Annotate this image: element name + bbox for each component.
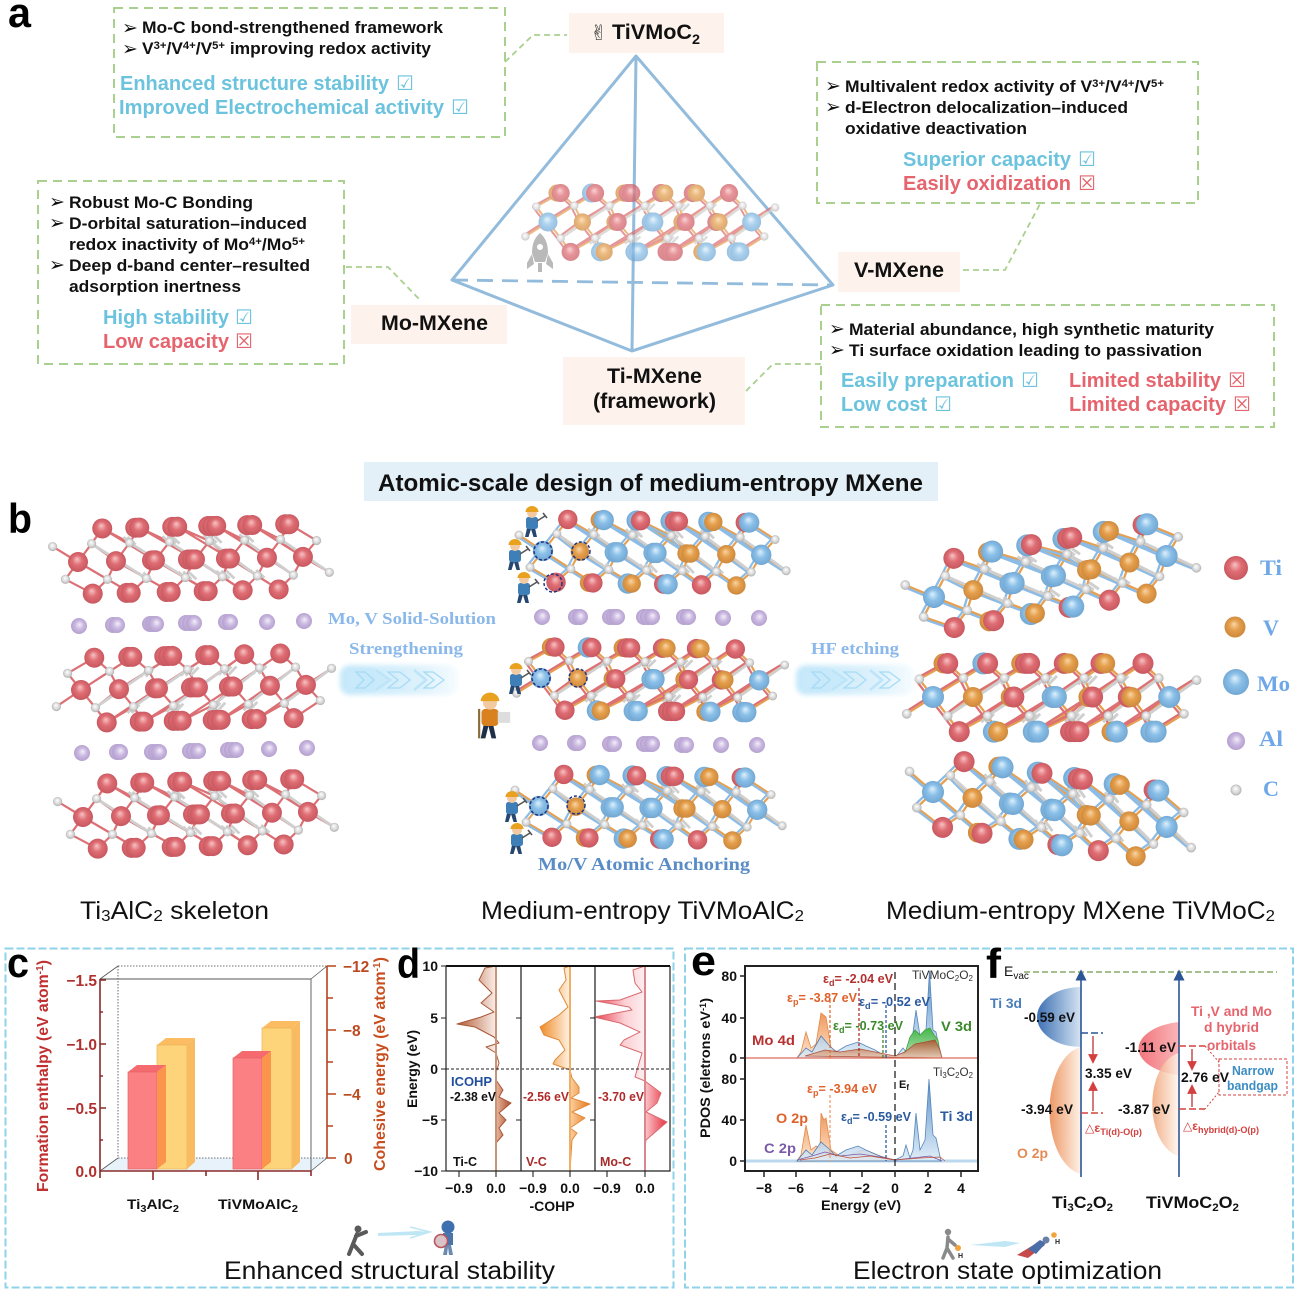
callout: TiVMoC2 properties <box>114 8 505 137</box>
axis labels: -COHP <box>529 1198 575 1214</box>
annotations: Mo 4d <box>752 1032 795 1048</box>
Mo-C curve <box>594 966 667 1147</box>
annotations: d <box>847 1116 853 1126</box>
energy annotations: orbitals <box>1207 1037 1256 1053</box>
V-C curve <box>540 966 590 1171</box>
energy annotations: hybrid(d)-O(p) <box>1198 1125 1259 1135</box>
annotations: = -3.87 eV <box>799 991 858 1005</box>
annotations: -2.56 eV <box>523 1090 570 1104</box>
axis labels: −0.9 <box>593 1180 621 1196</box>
callout: Ti-MXene properties: ☒ <box>1233 392 1251 416</box>
heading banner: Atomic-scale design of medium-entropy MXene <box>378 470 923 497</box>
material labels: TiVMoC <box>1146 1193 1209 1212</box>
callout: V-MXene properties: Easily oxidization <box>903 173 1071 195</box>
axis labels: PDOS (eletrons eV <box>697 1014 713 1138</box>
structure: medium-entropy MXene TiVMoC2 <box>895 505 1206 876</box>
axis labels: 0.0 <box>486 1180 506 1196</box>
energy annotations: -3.87 eV <box>1118 1101 1171 1117</box>
band edge dashes and arrows <box>1081 1033 1219 1113</box>
category labels: TiVMoAlC <box>218 1196 284 1212</box>
label: V-MXene: V-MXene <box>854 259 944 282</box>
material labels: 2 <box>1107 1202 1113 1214</box>
annotations: Mo-C <box>600 1155 631 1169</box>
annotations: = -2.04 eV <box>835 972 894 986</box>
right axis: cohesive energy: -1 <box>372 962 383 971</box>
Ti-C curve <box>457 966 511 1143</box>
right axis: cohesive energy <box>327 957 389 1171</box>
callout: Mo-MXene properties: 5+ <box>292 236 305 248</box>
annotations: p <box>793 997 799 1007</box>
callout: Ti-MXene properties: Limited stability <box>1069 370 1222 392</box>
category labels: 2 <box>292 1204 298 1215</box>
label: TiVMoC2: TiVMoC <box>612 21 690 44</box>
callout: Mo-MXene properties: ☑ <box>235 305 253 329</box>
callout: V-MXene properties: oxidative deactivation <box>845 119 1027 138</box>
callout: Mo-MXene properties: 4+ <box>249 236 262 248</box>
callout: Ti-MXene properties: Low cost <box>841 394 927 416</box>
annotations: E <box>899 1079 906 1091</box>
orbitals: Ti3C2O2 <box>1037 987 1081 1174</box>
annotations: = -0.52 eV <box>871 995 931 1009</box>
caption text: Enhanced structural stability <box>224 1257 556 1285</box>
legend: atoms: Mo <box>1257 671 1290 696</box>
axis labels: 4 <box>957 1180 965 1196</box>
energy annotations: △ε <box>1085 1121 1100 1135</box>
structure: Ti3AlC2 skeleton <box>47 513 339 860</box>
left axis: formation enthalpy <box>35 960 311 1192</box>
caption group: enhanced structural stability <box>224 1220 556 1285</box>
arrow: solid-solution strengthening: Mo, V Solid-Solution <box>328 609 497 628</box>
left axis: formation enthalpy: -1 <box>35 965 46 974</box>
axis labels: 0 <box>729 1050 737 1066</box>
callout: V-MXene properties: /V <box>1105 77 1122 96</box>
category labels <box>127 1196 298 1215</box>
dashed atom highlights <box>530 542 590 815</box>
callout: Mo-MXene properties: ➢ <box>49 191 65 213</box>
axis labels: −6 <box>788 1180 804 1196</box>
annotations: d <box>829 978 835 988</box>
material labels <box>1052 1193 1239 1214</box>
material labels: 2 <box>1212 1202 1219 1214</box>
callout: TiVMoC2 properties: 5+ <box>212 40 225 52</box>
callout: Ti-MXene properties: ☑ <box>934 392 952 416</box>
heading banner <box>364 462 938 501</box>
orbitals: TiVMoC2O2 <box>1139 1022 1179 1156</box>
callout: Ti-MXene properties: ➢ <box>829 318 845 340</box>
captions under structures: Ti <box>80 897 100 925</box>
annotations: ε <box>833 1019 839 1033</box>
captions under structures: 2 <box>795 908 804 925</box>
right axis: cohesive energy: ) <box>372 957 389 962</box>
axis labels: Energy (eV) <box>404 1030 420 1108</box>
energy annotations: Ti ,V and Mo <box>1191 1003 1272 1019</box>
MXene slab inside pyramid <box>521 184 779 261</box>
arrow: light blue transition <box>378 1227 430 1238</box>
callout: TiVMoC2 properties: 3+ <box>154 40 166 52</box>
right axis: cohesive energy: 0 <box>344 1151 353 1168</box>
callout: V-MXene properties: 4+ <box>1122 78 1135 90</box>
panel f: energy level diagram <box>986 940 1287 1214</box>
left axis: formation enthalpy: 0.0 <box>75 1164 97 1181</box>
panel letter b: b <box>8 495 32 542</box>
legend: atoms: Al <box>1259 726 1283 751</box>
callout: Mo-MXene properties: D-orbital saturation–induced <box>69 214 307 233</box>
captions under structures: skeleton <box>163 897 269 925</box>
frame and axes <box>740 966 978 1177</box>
annotations: d <box>865 1001 871 1011</box>
annotations: ε <box>823 972 829 986</box>
captions under structures: Medium-entropy MXene TiVMoC <box>886 897 1249 925</box>
callout: TiVMoC2 properties: ➢ <box>122 17 138 39</box>
callout: V-MXene properties: 5+ <box>1151 78 1164 90</box>
callout: Mo-MXene properties <box>38 181 344 364</box>
annotations: O 2p <box>776 1110 808 1126</box>
callout: Mo-MXene properties: ➢ <box>49 212 65 234</box>
callout: Mo-MXene properties: Low capacity <box>103 331 230 353</box>
right axis: cohesive energy: −12 <box>343 959 369 976</box>
material labels: 2 <box>1233 1202 1239 1214</box>
callout: Mo-MXene properties: /Mo <box>262 235 292 254</box>
annotations: 3 <box>942 1071 947 1080</box>
dashed energy markers <box>830 972 895 1171</box>
callout: Ti-MXene properties: Limited capacity <box>1069 394 1227 416</box>
annotations: ε <box>859 995 865 1009</box>
bars: Ti3AlC2 <box>128 1038 195 1169</box>
axis labels: 0 <box>729 1153 737 1169</box>
arrow: solid-solution strengthening <box>328 609 497 695</box>
left axis: formation enthalpy: Formation enthalpy (eV atom <box>35 978 52 1192</box>
annotations: V-C <box>526 1155 547 1169</box>
structure: medium-entropy TiVMoAlC2 <box>510 508 792 852</box>
vacuum level: E <box>1004 963 1013 979</box>
energy annotations: 2.76 eV <box>1181 1069 1230 1085</box>
annotations: d <box>839 1025 845 1035</box>
callout: TiVMoC2 properties: Mo-C bond-strengthened framework <box>142 18 444 37</box>
callout: V-MXene properties: ➢ <box>825 96 841 118</box>
callout: TiVMoC2 properties: /V <box>196 39 213 58</box>
energy annotations: Ti 3d <box>990 995 1022 1011</box>
callout: Mo-MXene properties: redox inactivity of Mo <box>69 235 244 254</box>
annotations: Ti 3d <box>940 1108 973 1124</box>
left axis: formation enthalpy: −1.0 <box>66 1037 97 1054</box>
pyramid frame <box>452 56 833 351</box>
axis labels: 0 <box>891 1180 899 1196</box>
caption group: electron state optimization <box>853 1229 1162 1285</box>
icon: flying hero with H <box>1017 1232 1060 1258</box>
callout: narrow bandgap <box>1219 1059 1287 1095</box>
legend: atoms: C <box>1263 776 1279 801</box>
axis labels: 40 <box>721 1010 737 1026</box>
annotations: 2 <box>969 1071 974 1080</box>
panel letter d: d <box>397 940 420 987</box>
annotations: TiVMoC <box>912 968 955 982</box>
axis labels: −0.9 <box>519 1180 547 1196</box>
callout: V-MXene properties <box>817 62 1198 203</box>
bars: TiVMoAlC2 <box>233 1021 300 1169</box>
callout: V-MXene properties: ☒ <box>1078 171 1096 195</box>
category labels: Ti <box>127 1196 139 1212</box>
callout: Ti-MXene properties: Material abundance, high synthetic maturity <box>849 320 1215 339</box>
label: Ti-MXene framework: Ti-MXene <box>607 365 702 388</box>
energy annotations: -1.11 eV <box>1125 1039 1177 1055</box>
callout: Ti-MXene properties: ➢ <box>829 339 845 361</box>
material labels: 2 <box>1087 1202 1093 1214</box>
annotations: 2 <box>969 974 974 983</box>
callout: TiVMoC2 properties: improving redox activity <box>225 39 432 58</box>
callout: TiVMoC2 properties: V <box>142 39 153 58</box>
callout: TiVMoC2 properties: ☑ <box>396 71 414 95</box>
annotations: O <box>959 968 969 982</box>
legend: atoms: Ti <box>1260 555 1282 580</box>
axis labels: −2 <box>854 1180 870 1196</box>
axis labels: Energy (eV) <box>821 1197 901 1213</box>
callout: TiVMoC2 properties: ☑ <box>451 95 469 119</box>
icon: grey walking figure with H <box>943 1229 963 1260</box>
axis labels: −10 <box>414 1163 438 1179</box>
energy annotations: △ε <box>1183 1119 1198 1133</box>
material labels: 3 <box>1067 1202 1074 1214</box>
panel frame: structural stability <box>6 948 674 1288</box>
left axis: formation enthalpy: ) <box>35 960 52 965</box>
legend: atoms: V <box>1263 615 1279 640</box>
panel a: pyramid design concept <box>8 0 1274 427</box>
icons: anchoring workers <box>479 506 547 854</box>
axis labels: ) <box>697 998 713 1003</box>
category labels: AlC <box>146 1196 173 1212</box>
panel letter c: c <box>7 939 29 986</box>
callout: narrow bandgap: Narrow <box>1232 1063 1275 1078</box>
captions under structures: 2 <box>153 908 163 925</box>
arrow: light blue transition <box>970 1241 1020 1247</box>
arrow: HF etching: HF etching <box>811 639 900 658</box>
callout: V-MXene properties: /V <box>1135 77 1152 96</box>
axis labels: 80 <box>721 1071 737 1087</box>
annotations: ε <box>841 1110 847 1124</box>
material labels: C <box>1074 1193 1087 1212</box>
axis labels: 2 <box>924 1180 932 1196</box>
label: Mo-MXene <box>351 305 507 344</box>
frame and axes <box>441 966 670 1177</box>
annotations <box>752 968 974 1156</box>
panel c: 3D bar chart <box>7 939 389 1215</box>
energy annotations <box>990 995 1272 1161</box>
callout: TiVMoC2 properties: Improved Electrochemical activity <box>119 97 445 119</box>
callout: Ti-MXene properties: ☒ <box>1228 368 1246 392</box>
vacuum level <box>1004 963 1277 982</box>
panel letter e: e <box>691 937 716 984</box>
icon: grey running figure <box>349 1226 366 1254</box>
connector lines <box>346 35 1040 391</box>
callout: TiVMoC2 properties: /V <box>166 39 184 58</box>
callout: TiVMoC2 properties: ➢ <box>122 38 138 60</box>
annotations: = -3.94 eV <box>819 1082 878 1096</box>
callout: Mo-MXene properties: Deep d-band center–resulted <box>69 256 310 275</box>
axis labels <box>404 958 655 1214</box>
label: Mo-MXene: Mo-MXene <box>381 312 488 335</box>
energy annotations: d hybrid <box>1204 1019 1259 1035</box>
icon: shield hero <box>434 1220 454 1255</box>
captions under structures: Medium-entropy TiVMoAlC <box>481 897 780 925</box>
callout: TiVMoC2 properties: Enhanced structure stability <box>120 73 390 95</box>
annotations: Ti-C <box>453 1155 477 1169</box>
axis labels: 80 <box>721 968 737 984</box>
annotations: = -0.73 eV <box>845 1019 904 1033</box>
energy annotations: 3.35 eV <box>1085 1065 1133 1081</box>
label: V-MXene <box>838 252 960 292</box>
annotations: Ti <box>933 1065 943 1079</box>
panel d: COHP plots <box>397 940 670 1214</box>
right axis: cohesive energy: −8 <box>343 1023 361 1040</box>
annotations: ICOHP <box>451 1075 492 1089</box>
legend: atoms <box>1223 555 1290 801</box>
material labels: O <box>1093 1193 1107 1212</box>
right axis: cohesive energy: Cohesive energy (eV atom <box>372 977 389 1171</box>
energy annotations: -3.94 eV <box>1021 1101 1074 1117</box>
callout: Ti-MXene properties: ☑ <box>1021 368 1039 392</box>
label: TiVMoC2: ✌ <box>590 21 608 45</box>
callout: Mo-MXene properties: High stability <box>103 307 230 329</box>
annotations: -3.70 eV <box>598 1090 645 1104</box>
bottom PDOS curves <box>745 1079 978 1161</box>
label: Mo/V atomic anchoring: Mo/V Atomic Anchoring <box>538 854 750 874</box>
axis labels: -1 <box>698 1003 708 1011</box>
label: TiVMoC2 <box>569 13 724 53</box>
callout: Ti-MXene properties: Easily preparation <box>841 370 1014 392</box>
axis labels: −5 <box>422 1112 438 1128</box>
annotations: O <box>960 1065 969 1079</box>
annotations: -2.38 eV <box>450 1090 497 1104</box>
icon: flying hero with H: H <box>1055 1239 1060 1246</box>
material labels: O <box>1219 1193 1233 1212</box>
energy axes <box>1081 975 1179 1177</box>
callout: V-MXene properties: ☑ <box>1078 147 1096 171</box>
annotations: V 3d <box>941 1018 972 1034</box>
left axis: formation enthalpy: −0.5 <box>66 1101 97 1118</box>
vacuum level: vac <box>1013 971 1029 982</box>
callout: Ti-MXene properties <box>821 305 1274 427</box>
axis labels: 40 <box>721 1112 737 1128</box>
axis labels <box>697 968 965 1213</box>
axis labels: −4 <box>822 1180 838 1196</box>
axis labels: −0.9 <box>445 1180 473 1196</box>
captions under structures <box>80 897 1275 925</box>
left axis: formation enthalpy: −1.5 <box>66 973 97 990</box>
caption text: Electron state optimization <box>853 1257 1162 1285</box>
annotations: p <box>813 1088 819 1098</box>
right axis: cohesive energy: −4 <box>343 1087 361 1104</box>
icon: grey walking figure with H: H <box>958 1253 963 1260</box>
axis labels: 0 <box>430 1061 438 1077</box>
label: Ti-MXene framework: (framework) <box>593 390 716 413</box>
callout: Mo-MXene properties: ➢ <box>49 254 65 276</box>
axis labels: −8 <box>756 1180 772 1196</box>
callout: Mo-MXene properties: adsorption inertness <box>69 277 241 296</box>
icon: rocket <box>527 233 553 272</box>
axis labels: 0.0 <box>560 1180 580 1196</box>
callout: narrow bandgap: bandgap <box>1227 1078 1278 1093</box>
category labels: 3 <box>140 1204 147 1215</box>
energy annotations: -0.59 eV <box>1024 1009 1076 1025</box>
top PDOS curves <box>745 971 978 1058</box>
3D box frame <box>100 966 327 1171</box>
callout: Mo-MXene properties: ☒ <box>235 329 253 353</box>
captions under structures: AlC <box>111 897 153 925</box>
axis labels: 0.0 <box>635 1180 655 1196</box>
label: Ti-MXene framework <box>563 357 745 425</box>
annotations: 2 <box>955 974 960 983</box>
energy annotations: O 2p <box>1017 1145 1048 1161</box>
label: TiVMoC2: 2 <box>692 31 700 47</box>
callout: V-MXene properties: ➢ <box>825 75 841 97</box>
callout: TiVMoC2 properties: 4+ <box>183 40 196 52</box>
callout: V-MXene properties: Superior capacity <box>903 149 1072 171</box>
callout: V-MXene properties: d-Electron delocalization–induced <box>845 98 1128 117</box>
category labels: 2 <box>173 1204 179 1215</box>
captions under structures: 2 <box>1266 908 1275 925</box>
callout: V-MXene properties: 3+ <box>1092 78 1105 90</box>
callout: V-MXene properties: Multivalent redox activity of V <box>845 77 1085 96</box>
annotations: C 2p <box>764 1140 796 1156</box>
panel b: atomic-scale design <box>8 462 1290 925</box>
arrow: HF etching <box>796 639 914 695</box>
annotations: = -0.59 eV <box>853 1110 912 1124</box>
annotations: ε <box>787 991 793 1005</box>
arrow: solid-solution strengthening: Strengthening <box>349 639 464 658</box>
annotations: f <box>906 1083 909 1092</box>
energy annotations: Ti(d)-O(p) <box>1100 1127 1142 1137</box>
annotations <box>450 1075 645 1169</box>
panel frame: electron state <box>685 948 1293 1288</box>
callout: Ti-MXene properties: Ti surface oxidation leading to passivation <box>849 341 1202 360</box>
annotations: ε <box>807 1082 813 1096</box>
callout: Mo-MXene properties: Robust Mo-C Bonding <box>69 193 253 212</box>
panel letter f: f <box>986 940 1002 987</box>
annotations: C <box>947 1065 955 1079</box>
axis labels: 5 <box>430 1010 438 1026</box>
captions under structures: 3 <box>101 908 111 925</box>
annotations: 2 <box>955 1071 960 1080</box>
panel e: PDOS plots <box>691 937 978 1213</box>
material labels: Ti <box>1052 1193 1067 1212</box>
axis labels: 10 <box>422 958 438 974</box>
